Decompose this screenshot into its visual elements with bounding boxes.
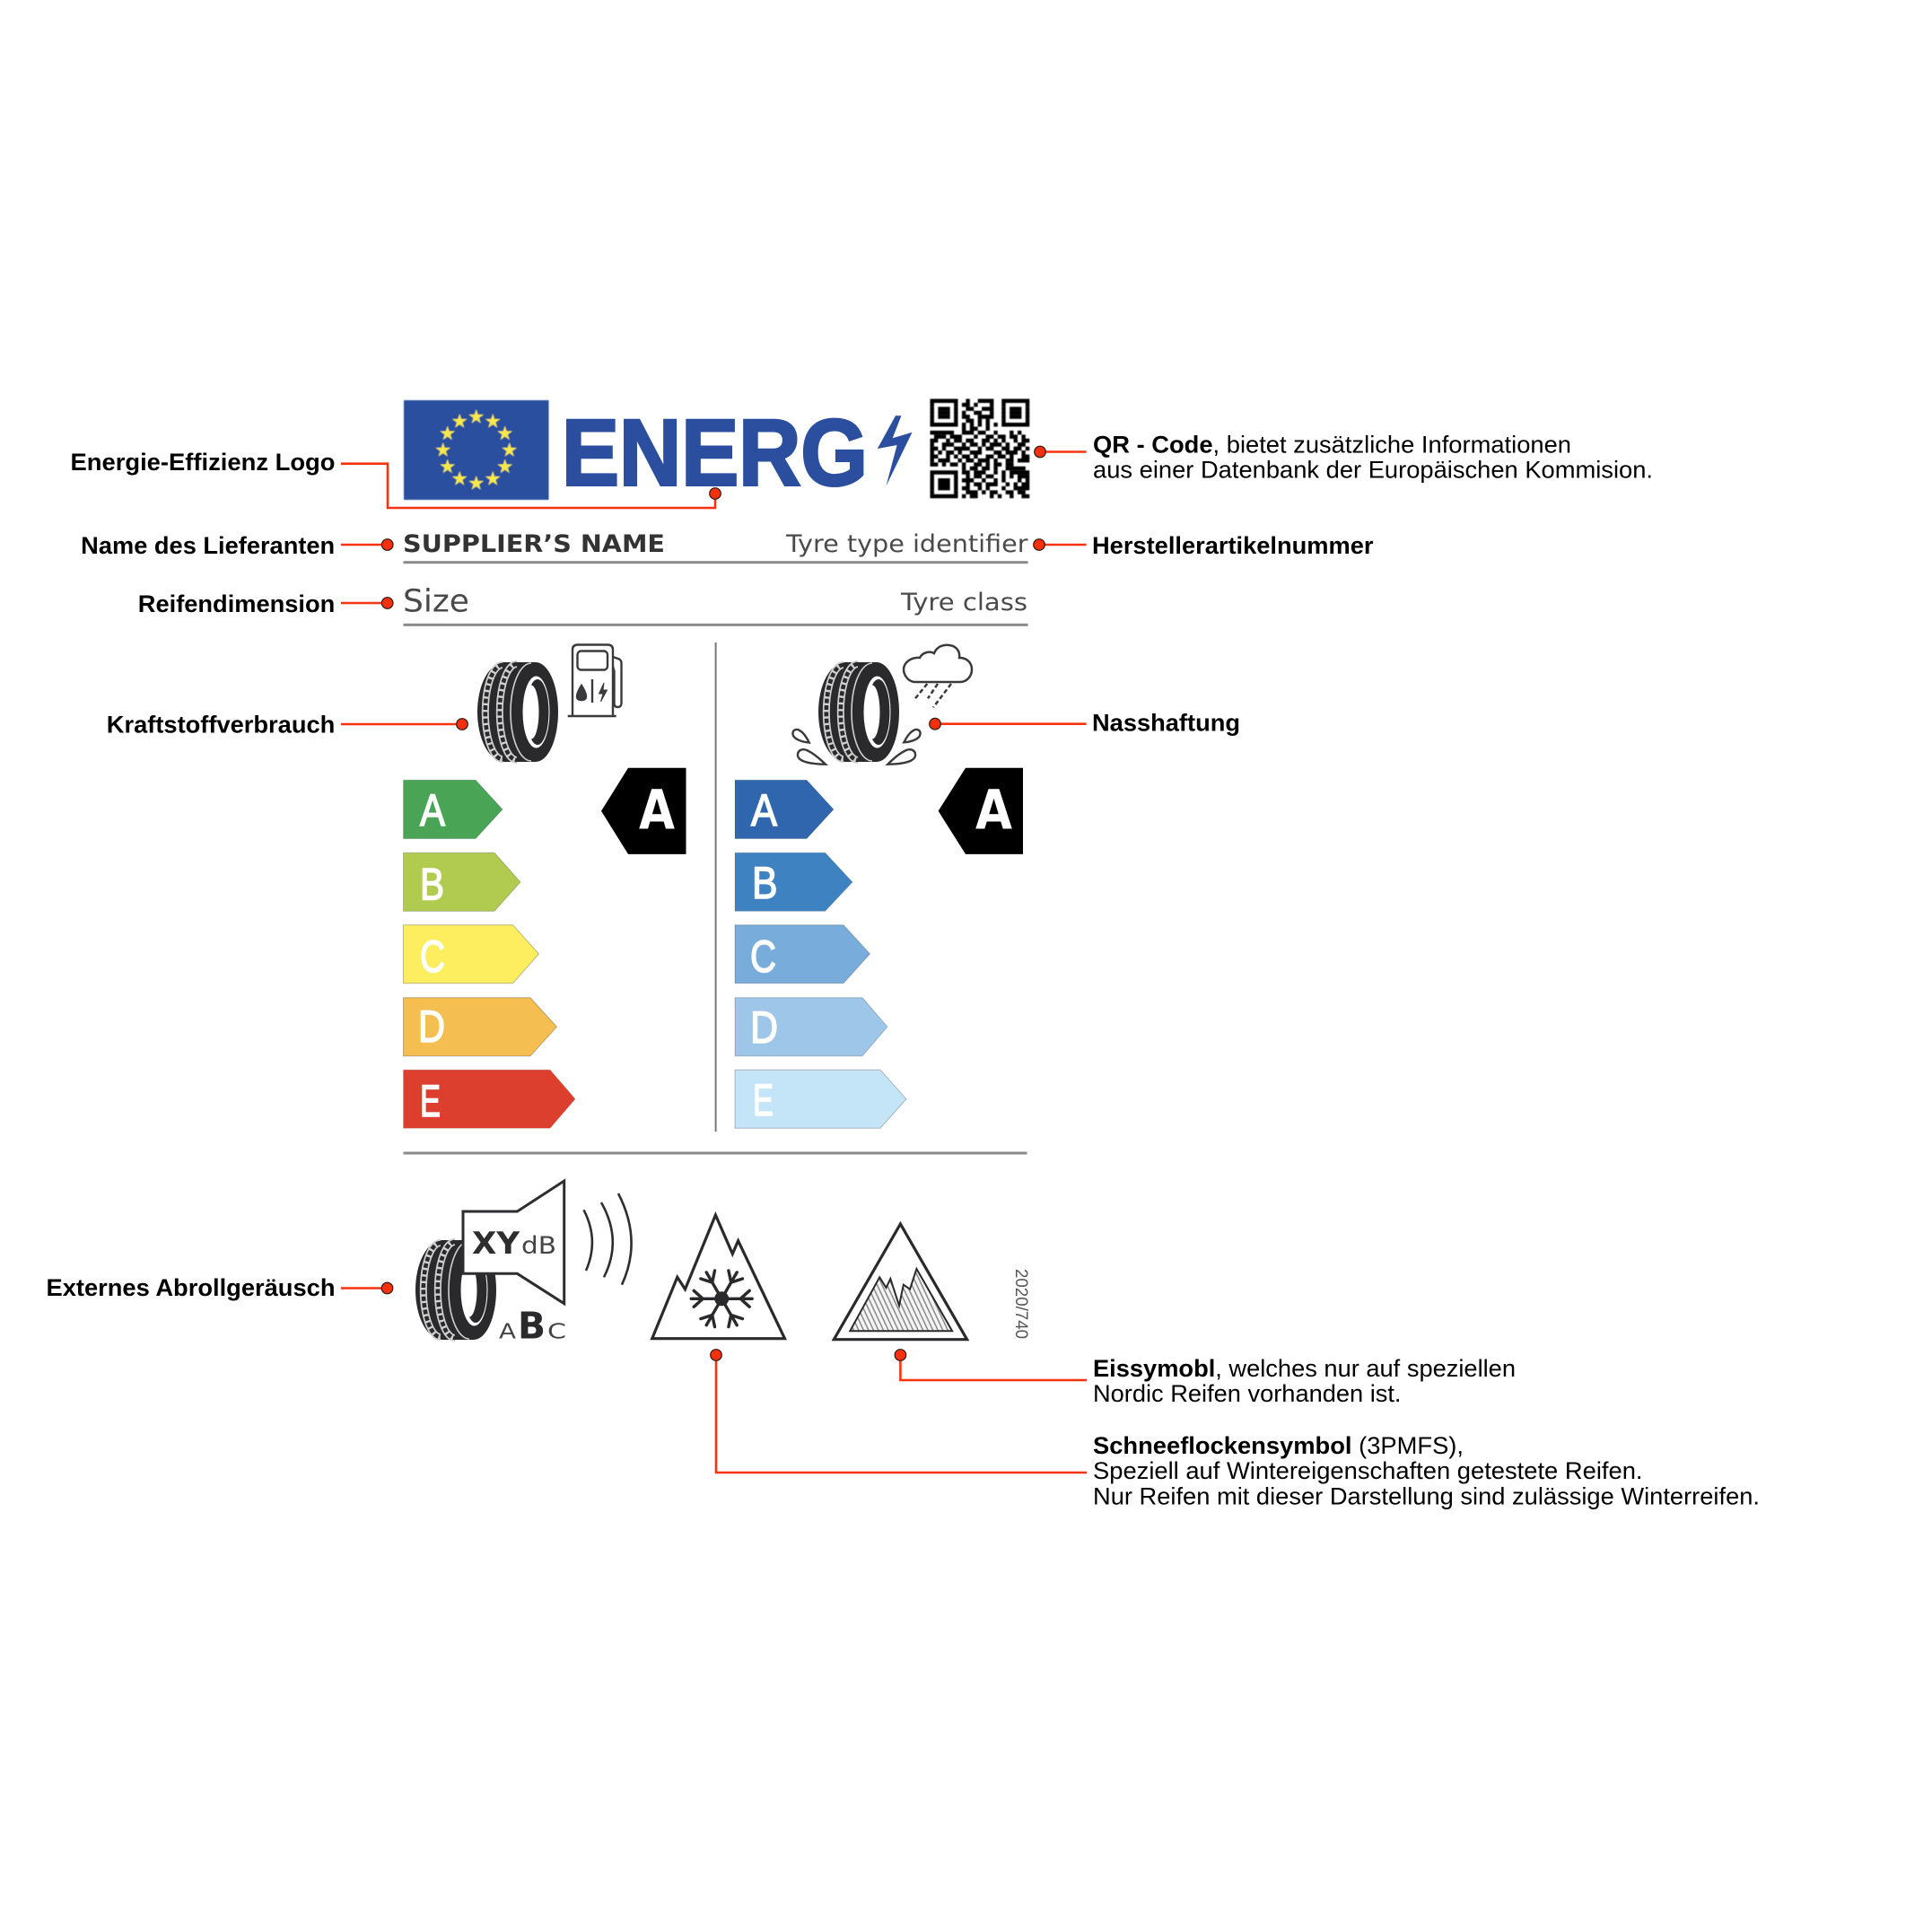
noise classes ABC [499,1305,566,1348]
noise classes ABC: B [518,1305,546,1348]
callout: Name des Lieferanten: Name des Lieferanten [81,532,335,559]
arrow E: E [753,1075,774,1125]
rating badge A: A [639,779,675,842]
arrow D: D [750,1002,778,1053]
callout: QR-Code: aus einer Datenbank der Europäischen Kommision. [1093,457,1653,484]
unit dB: dB [521,1232,556,1260]
icon: fuel pump [568,644,621,716]
callout: QR-Code: QR - Code, bietet zusätzliche Informationen [1093,431,1571,458]
arrow A [735,780,834,839]
callout: Eissymbol: Eissymobl, welches nur auf speziellen [1093,1355,1516,1382]
callout: Energie-Effizienz Logo [70,449,721,508]
icon: EU flag [404,400,549,500]
rating badge A [939,768,1023,854]
icon: tyre [415,1240,496,1340]
arrow E [404,1070,575,1128]
icon: tyre [818,662,899,762]
callout: Herstellerartikelnummer: Herstellerartikelnummer [1092,532,1373,559]
callout: Eissymbol [895,1350,1516,1407]
callout: Kraftstoffverbrauch: Kraftstoffverbrauch [107,712,335,739]
rating badge A: A [975,779,1012,842]
arrow B: B [752,858,777,908]
panel: fuel efficiency [404,644,686,1128]
callout: Externes Abrollgeräusch: Externes Abrollgeräusch [47,1274,336,1301]
arrow C: C [420,931,445,982]
noise value XY: XY [472,1226,520,1262]
callout: Schneeflockensymbol: Speziell auf Wintereigenschaften getestete Reifen. [1093,1457,1642,1484]
callout: Nasshaftung: Nasshaftung [1092,709,1240,736]
icon: three-peak mountain snowflake [652,1215,784,1339]
arrow C [404,925,538,983]
size: Size [403,584,469,620]
arrow E [735,1070,906,1128]
regulation number: 2020/740 [1011,1269,1030,1339]
icon: sound waves [583,1193,632,1285]
icon: water splashes [792,730,921,765]
arrow B: B [420,860,444,910]
callout: Schneeflockensymbol: Schneeflockensymbol (3PMFS), [1093,1432,1464,1459]
icon: rain cloud [904,645,972,707]
arrow B [404,852,520,911]
rating badge A [601,768,686,854]
arrow A: A [751,785,778,835]
arrow D [735,998,887,1056]
callout: Nasshaftung [930,709,1240,736]
arrow A [404,780,503,839]
callout: Schneeflockensymbol: Nur Reifen mit dieser Darstellung sind zulässige Winterreifen. [1093,1483,1760,1510]
logo wordmark: ENERG: ENERG [562,400,868,506]
arrow D [404,998,556,1056]
noise classes ABC: C [547,1321,566,1344]
callout: Energie-Effizienz Logo: Energie-Effizienz Logo [70,449,336,476]
arrow D: D [418,1001,445,1052]
tyre type identifier: Tyre type identifier [785,530,1028,558]
panel: external rolling noise [415,1181,632,1348]
QR code [930,401,1029,496]
tyre class: Tyre class [900,589,1027,616]
icon: ice grip mountain [834,1224,967,1340]
icon: loudspeaker [463,1181,564,1304]
arrow C: C [750,931,776,982]
arrow B [735,852,852,911]
callout: Schneeflockensymbol [711,1350,1760,1510]
arrow C [735,925,870,983]
icon: tyre [477,662,558,762]
callout: Kraftstoffverbrauch [107,712,468,739]
arrow E: E [420,1076,441,1126]
panel: tyre label [403,400,1030,1348]
callout: Reifendimension: Reifendimension [138,590,335,617]
panel: wet grip [735,645,1023,1128]
callout: QR-Code [1035,431,1653,484]
arrow A: A [420,785,446,835]
icon: energy bolt [878,415,912,486]
noise classes ABC: A [499,1321,516,1344]
callout: Eissymbol: Nordic Reifen vorhanden ist. [1093,1380,1402,1407]
supplier's name: SUPPLIER’S NAME [403,530,665,558]
